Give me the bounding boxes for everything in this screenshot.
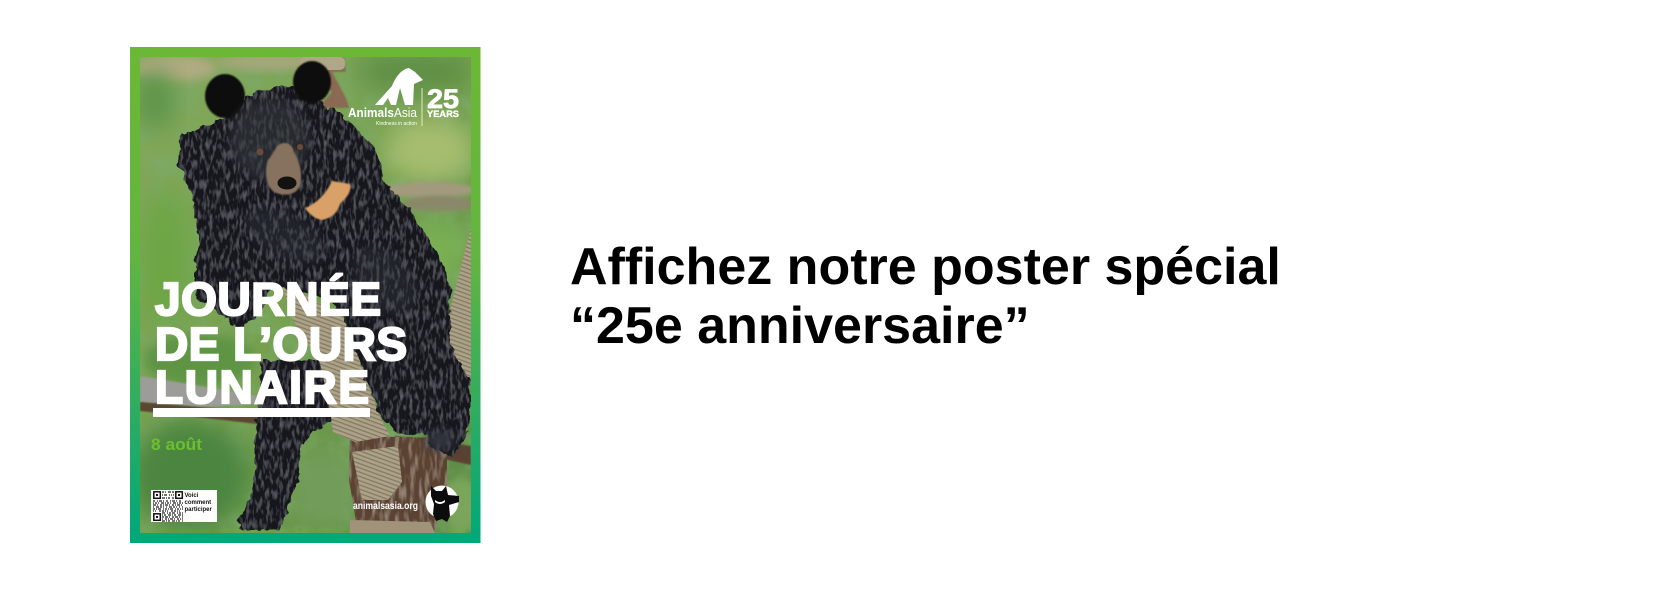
- bear head shading: [230, 98, 454, 450]
- QR caption: comment: [184, 500, 211, 506]
- website: animalsasia.org: [353, 500, 418, 512]
- right ear: [293, 61, 331, 103]
- top rope on trunk: [300, 57, 349, 108]
- logo wordmark: AnimalsAsia: [348, 105, 418, 120]
- heading: “25e anniversaire”: [570, 297, 1030, 355]
- QR code card: [151, 490, 217, 522]
- Animals Asia logo with 25 years badge: [348, 68, 459, 127]
- QR caption: Voici: [184, 493, 199, 499]
- QR code: [153, 492, 183, 521]
- 25 mark: 25: [427, 84, 459, 114]
- bear muzzle: [266, 143, 301, 195]
- QR caption: participer: [184, 507, 213, 513]
- left ear: [205, 74, 245, 118]
- logo icon: bear triangle: [375, 68, 423, 105]
- right rope: [449, 228, 471, 385]
- moon bear badge: [426, 486, 459, 522]
- date: 8 août: [151, 435, 202, 454]
- title line 2: DE L’OURS: [155, 318, 407, 370]
- title line 1: JOURNÉE: [155, 273, 381, 325]
- bear hind leg: [238, 360, 337, 530]
- logo divider: [422, 88, 423, 126]
- blurred meadow background: [130, 52, 482, 533]
- logo tagline: Kindness in action: [376, 121, 417, 127]
- rope around bear and trunk: [280, 280, 435, 533]
- poster title: [155, 273, 407, 413]
- chest patch: [305, 181, 350, 220]
- tree trunk: [349, 436, 447, 533]
- title underline: [153, 408, 370, 417]
- photo of moon bear on a rope-wrapped tree: [130, 52, 482, 533]
- right branch: [392, 436, 471, 465]
- title line 3: LUNAIRE: [155, 361, 369, 413]
- bear nose: [278, 176, 296, 190]
- heading: [570, 238, 1281, 355]
- poster frame: [130, 47, 480, 543]
- left branch: [140, 376, 262, 424]
- poster: [130, 47, 480, 543]
- bear body: [178, 87, 470, 457]
- YEARS mark: YEARS: [427, 109, 459, 120]
- bear eyes: [256, 144, 303, 156]
- heading: Affichez notre poster spécial: [570, 238, 1281, 296]
